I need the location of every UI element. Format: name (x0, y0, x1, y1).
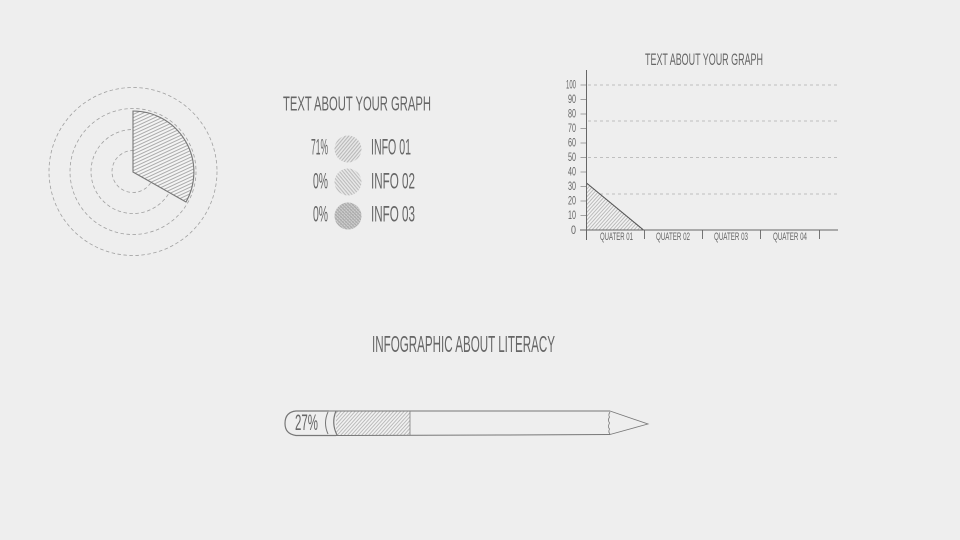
x axis labels: QUATER 03 (714, 231, 748, 243)
legend title: TEXT ABOUT YOUR GRAPH (283, 94, 431, 116)
hatched wedge (133, 111, 194, 202)
y axis labels: 30 (568, 179, 576, 193)
y axis labels: 100 (566, 78, 576, 92)
y axis labels: 80 (568, 106, 576, 120)
legend row 2: 0% (313, 168, 328, 194)
y axis labels: 0 (571, 223, 576, 237)
legend row 2: INFO 02 (371, 168, 415, 194)
pencil percentage: 27% (295, 410, 318, 435)
legend row 2 (313, 168, 415, 196)
legend (283, 94, 431, 230)
chart title: TEXT ABOUT YOUR GRAPH (645, 50, 763, 69)
legend row 3: 0% (313, 202, 328, 226)
x axis labels: QUATER 01 (600, 231, 633, 243)
legend row 1: 71% (311, 134, 328, 160)
y axis labels: 40 (568, 164, 576, 178)
pencil tip (610, 411, 648, 434)
y axis labels: 70 (568, 121, 576, 135)
legend: INFO 01 (371, 134, 411, 160)
y axis labels: 10 (568, 208, 576, 222)
axes (580, 70, 838, 240)
main title: INFOGRAPHIC ABOUT LITERACY (372, 331, 555, 357)
legend row 3: INFO 03 (371, 202, 415, 226)
pencil chart (285, 410, 648, 436)
pencil body (285, 411, 648, 436)
legend row 1 (311, 134, 411, 162)
pencil progress fill (336, 411, 410, 435)
radial chart (49, 88, 217, 256)
y axis labels: 50 (568, 150, 576, 164)
x axis labels: QUATER 04 (773, 231, 807, 243)
legend row 3 (313, 202, 415, 230)
x axis labels (600, 231, 807, 243)
y axis labels: 60 (568, 136, 576, 150)
area chart (566, 50, 839, 243)
dashed concentric rings (49, 88, 217, 256)
x axis labels: QUATER 02 (656, 231, 690, 243)
y axis labels: 90 (568, 92, 576, 106)
area series (586, 183, 644, 230)
y axis labels: 20 (568, 194, 576, 208)
y axis labels (566, 78, 576, 237)
